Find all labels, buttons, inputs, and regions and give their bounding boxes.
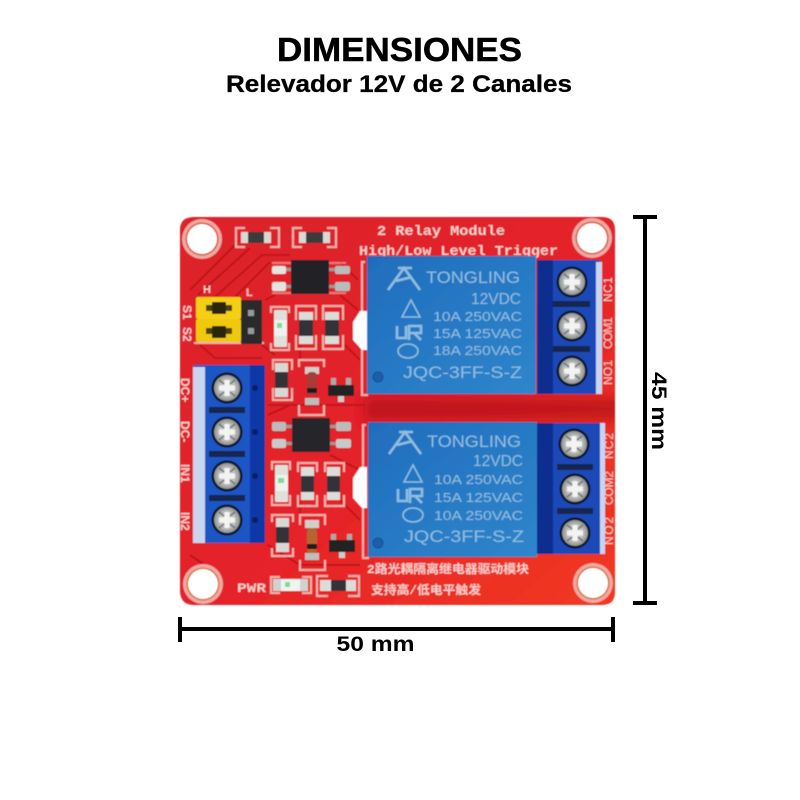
title: DIMENSIONES xyxy=(277,31,522,68)
relay 2 xyxy=(368,422,537,557)
terminal block left xyxy=(193,365,265,543)
icon: relay dot xyxy=(373,538,383,548)
text: relay specifications: 18A 250VAC xyxy=(433,343,522,358)
silkscreen: output labels: NC2 xyxy=(602,433,616,459)
silkscreen: jumper labels: S1 xyxy=(180,305,194,320)
shaded band between relays xyxy=(365,398,625,420)
text: relay specifications xyxy=(403,268,522,382)
silkscreen: chinese module name: 2路光耦隔离继电器驱动模块 xyxy=(367,561,529,577)
width label: 50 mm xyxy=(336,633,414,656)
text: relay specifications: JQC-3FF-S-Z xyxy=(403,363,522,382)
silkscreen: jumper labels: L xyxy=(246,287,253,299)
terminal block right 2 xyxy=(537,423,605,554)
silkscreen: input labels: IN1 xyxy=(178,464,192,483)
silkscreen: power label: PWR xyxy=(237,581,266,596)
optocoupler 2 xyxy=(272,418,351,452)
icon: relay dot xyxy=(373,372,383,382)
silkscreen: input labels: DC- xyxy=(178,421,192,442)
silkscreen: input labels: IN2 xyxy=(178,512,192,531)
silkscreen: output labels: NO2 xyxy=(602,517,616,545)
upper small components xyxy=(271,306,354,415)
silkscreen: output labels: NO1 xyxy=(601,360,615,385)
silkscreen: chinese trigger label: 支持高/低电平触发 xyxy=(371,582,481,598)
terminal block right 1 xyxy=(537,260,602,394)
silkscreen: trigger label: High/Low Level Trigger xyxy=(359,245,558,260)
silkscreen: output labels: NC1 xyxy=(601,277,615,302)
optocoupler 1 xyxy=(272,260,350,294)
silkscreen: input labels xyxy=(178,378,192,531)
mounting holes xyxy=(182,218,613,604)
silkscreen: output labels xyxy=(601,277,616,545)
lower small components xyxy=(272,462,355,570)
silkscreen: output labels: COM2 xyxy=(602,471,616,505)
copper traces xyxy=(190,245,365,565)
text: relay specifications: 10A 250VAC xyxy=(434,508,523,523)
text: relay specifications: TONGLING xyxy=(426,268,520,287)
relay notches xyxy=(353,262,369,558)
panel: red circuit board xyxy=(180,217,615,605)
silkscreen: module name: 2 Relay Module xyxy=(377,225,505,240)
text: relay specifications: JQC-3FF-S-Z xyxy=(404,527,524,546)
silkscreen: input labels: DC+ xyxy=(178,378,192,402)
text: relay specifications xyxy=(404,432,524,546)
arrow: width dimension line xyxy=(180,617,613,642)
silkscreen: jumper labels: S2 xyxy=(180,327,194,342)
arrow: height dimension line xyxy=(633,217,657,603)
icon: relay logo xyxy=(389,432,421,454)
text: relay specifications: 15A 125VAC xyxy=(434,490,523,505)
text: relay specifications: 10A 250VAC xyxy=(433,309,522,324)
silkscreen: jumper labels xyxy=(180,284,253,342)
icon: relay logo xyxy=(388,268,420,290)
silkscreen: jumper labels: H xyxy=(203,284,211,296)
top resistors xyxy=(236,228,336,247)
text: relay specifications: 12VDC xyxy=(471,291,521,308)
height label: 45 mm xyxy=(647,372,670,450)
icon: certification marks xyxy=(397,300,421,358)
jumper header xyxy=(194,297,264,344)
text: relay specifications: 15A 125VAC xyxy=(433,326,522,341)
text: relay specifications: 10A 250VAC xyxy=(434,472,523,487)
power LED and resistor xyxy=(271,576,359,596)
subtitle: Relevador 12V de 2 Canales xyxy=(226,71,572,98)
silkscreen: output labels: COM1 xyxy=(601,317,615,349)
relay 1 xyxy=(367,256,536,394)
relay module board xyxy=(178,217,625,605)
icon: certification marks xyxy=(398,465,423,522)
text: relay specifications: TONGLING xyxy=(427,432,521,451)
text: relay specifications: 12VDC xyxy=(473,453,523,470)
